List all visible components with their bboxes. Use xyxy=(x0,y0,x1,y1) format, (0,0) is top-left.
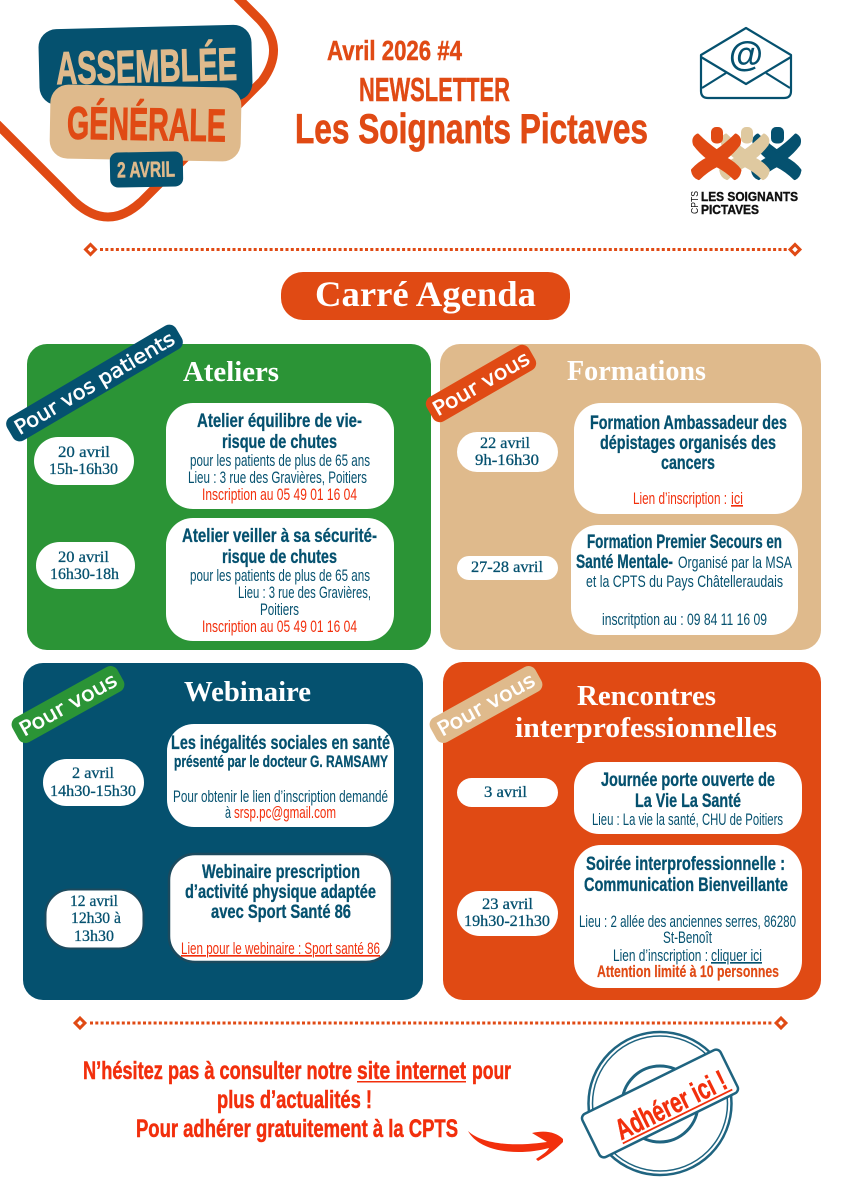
card: premier secours xyxy=(571,525,798,635)
date pill: 2 avril xyxy=(43,759,144,806)
card: inégalités sociales xyxy=(167,724,394,827)
date pill: 23 avril xyxy=(457,891,558,936)
card: atelier sécurité: risque de chutes xyxy=(222,547,337,568)
card: formation ambassadeur: Lien d’inscription : xyxy=(633,490,727,508)
card: atelier équilibre: Inscription au 05 49 01 16 04 xyxy=(202,486,357,504)
date pill: 2 avril: 2 avril xyxy=(72,765,115,782)
badge: Assemblée Générale 2 avril xyxy=(0,0,274,217)
card: atelier sécurité: Poitiers xyxy=(260,601,299,619)
logo: CPTS Les Soignants Pictaves: CPTS xyxy=(690,191,701,214)
card: prescription activité physique: Webinaire prescription xyxy=(202,862,360,883)
card: premier secours: inscritption au : 09 84 11 16 09 xyxy=(602,611,767,629)
date pill: 3 avril: 3 avril xyxy=(484,784,528,801)
text block: call to action xyxy=(83,1057,511,1143)
text block: call to action: pour xyxy=(472,1057,511,1085)
header title xyxy=(295,35,648,152)
heading: Formations: Formations xyxy=(567,355,706,387)
heading: Rencontres interprofessionnelles: interprofessionnelles xyxy=(515,712,777,744)
date pill: 22 avril: 22 avril xyxy=(480,435,531,452)
card: prescription activité physique xyxy=(169,854,392,962)
date pill: 2 avril: 14h30-15h30 xyxy=(50,783,136,800)
card: soirée interprofessionnelle: cliquer ici xyxy=(711,947,762,965)
header title: Avril 2026 #4 xyxy=(327,35,462,66)
text block: call to action: site internet xyxy=(357,1057,467,1085)
card: journée porte ouverte: La Vie La Santé xyxy=(635,791,741,812)
card: atelier équilibre: Atelier équilibre de vie- xyxy=(197,411,362,432)
card: inégalités sociales: Pour obtenir le lien d’inscription demandé xyxy=(173,788,388,806)
card: soirée interprofessionnelle: Attention limité à 10 personnes xyxy=(597,963,779,981)
panel: Webinaire xyxy=(23,663,423,1000)
icon: envelope with at sign: @ xyxy=(729,35,763,74)
tag: Pour vos patients: Pour vos patients xyxy=(10,326,179,440)
card: journée porte ouverte xyxy=(574,762,802,834)
tag: Pour vous (Formations): Pour vous xyxy=(428,346,534,421)
card: prescription activité physique: d’activité physique adaptée xyxy=(185,882,376,903)
card: premier secours: Santé Mentale- xyxy=(576,552,673,573)
heading: Carré Agenda xyxy=(281,272,570,320)
date pill: 12 avril: 12h30 à xyxy=(71,910,121,927)
card: soirée interprofessionnelle: St-Benoît xyxy=(663,929,712,947)
tag: Pour vous (Rencontres): Pour vous xyxy=(433,668,539,741)
heading: Webinaire: Webinaire xyxy=(184,676,311,708)
date pill: 12 avril: 12 avril xyxy=(70,893,119,910)
stamp: Adhérer ici xyxy=(580,1032,740,1175)
card: soirée interprofessionnelle: Lien d’inscription : xyxy=(613,947,708,965)
card: premier secours: et la CPTS du Pays Châtelleraudais xyxy=(586,573,783,591)
card: atelier sécurité xyxy=(166,518,394,641)
date pill: 20 avril 16h30: 16h30-18h xyxy=(50,566,119,583)
date pill: 20 avril 15h xyxy=(34,437,134,485)
card: inégalités sociales: Les inégalités sociales en santé xyxy=(171,733,390,754)
card: inégalités sociales: srsp.pc@gmail.com xyxy=(234,804,336,822)
date pill: 22 avril: 9h-16h30 xyxy=(475,452,539,469)
card: prescription activité physique: Lien pour le webinaire : Sport santé 86 xyxy=(181,940,380,958)
card: formation ambassadeur: Formation Ambassadeur des xyxy=(590,413,787,434)
card: atelier sécurité: pour les patients de plus de 65 ans xyxy=(190,567,370,585)
text block: call to action: Pour adhérer gratuitement à la CPTS xyxy=(136,1115,458,1143)
card: soirée interprofessionnelle: Communication Bienveillante xyxy=(584,875,788,896)
panel: Formations xyxy=(440,344,821,650)
arrow: to stamp xyxy=(468,1131,563,1161)
card: premier secours: Organisé par la MSA xyxy=(678,554,792,572)
card: prescription activité physique: avec Sport Santé 86 xyxy=(211,902,351,923)
card: soirée interprofessionnelle: Soirée interprofessionnelle : xyxy=(586,854,785,875)
tag: Pour vous (Webinaire): Pour vous xyxy=(15,668,121,741)
card: soirée interprofessionnelle xyxy=(574,845,802,988)
header title: NEWSLETTER xyxy=(359,71,510,108)
date pill: 27-28 avril xyxy=(457,556,558,580)
tag: Pour vous (Webinaire) xyxy=(9,663,127,746)
date pill: 12 avril xyxy=(46,890,144,948)
date pill: 27-28 avril: 27-28 avril xyxy=(471,559,544,576)
card: inégalités sociales: présenté par le docteur G. RAMSAMY xyxy=(174,753,388,771)
panel: Ateliers xyxy=(27,344,431,650)
badge: Assemblée Générale 2 avril: ASSEMBLÉE xyxy=(55,38,238,94)
date pill: 22 avril xyxy=(457,432,558,472)
logo: CPTS Les Soignants Pictaves: PICTAVES xyxy=(701,202,759,217)
card: formation ambassadeur: ici xyxy=(731,490,743,508)
header title: Les Soignants Pictaves xyxy=(295,105,648,152)
date pill: 23 avril: 19h30-21h30 xyxy=(464,913,550,930)
date pill: 23 avril: 23 avril xyxy=(482,896,534,913)
date pill: 20 avril 16h30 xyxy=(36,542,135,589)
text block: call to action: plus d’actualités ! xyxy=(217,1086,372,1114)
card: inégalités sociales: à xyxy=(225,804,232,822)
card: atelier équilibre: Lieu : 3 rue des Gravières, Poitiers xyxy=(188,469,367,487)
date pill: 20 avril 15h: 20 avril xyxy=(58,444,111,461)
card: formation ambassadeur: cancers xyxy=(661,453,715,474)
card: atelier équilibre xyxy=(166,403,394,509)
card: atelier sécurité: Atelier veiller à sa sécurité- xyxy=(182,526,377,547)
heading: Rencontres interprofessionnelles: Rencontres xyxy=(577,680,716,712)
logo: CPTS Les Soignants Pictaves xyxy=(690,127,800,217)
date pill: 3 avril xyxy=(457,778,558,807)
badge: Assemblée Générale 2 avril: GÉNÉRALE xyxy=(67,97,226,151)
card: formation ambassadeur xyxy=(574,403,802,514)
heading: Rencontres interprofessionnelles xyxy=(515,680,777,744)
date pill: 20 avril 15h: 15h-16h30 xyxy=(49,461,118,478)
card: journée porte ouverte: Journée porte ouverte de xyxy=(601,770,775,791)
card: atelier équilibre: pour les patients de plus de 65 ans xyxy=(190,452,370,470)
badge: Assemblée Générale 2 avril: 2 AVRIL xyxy=(117,156,175,183)
tag: Pour vous (Rencontres) xyxy=(427,663,545,746)
date pill: 12 avril: 13h30 xyxy=(74,928,114,945)
date pill: 20 avril 16h30: 20 avril xyxy=(58,549,110,566)
stamp: Adhérer ici: Adhérer ici ! xyxy=(610,1065,732,1147)
heading: Ateliers: Ateliers xyxy=(183,356,279,388)
tag: Pour vous (Formations) xyxy=(423,342,539,425)
text block: call to action: N’hésitez pas à consulter notre xyxy=(83,1057,352,1085)
logo: CPTS Les Soignants Pictaves: LES SOIGNANTS xyxy=(701,189,798,204)
icon: envelope with at sign xyxy=(701,28,791,98)
card: atelier sécurité: Lieu : 3 rue des Gravières, xyxy=(238,584,371,602)
panel: Rencontres interprofessionnelles xyxy=(443,662,821,1000)
card: atelier équilibre: risque de chutes xyxy=(222,432,337,453)
heading: Carré Agenda: Carré Agenda xyxy=(315,274,536,314)
card: atelier sécurité: Inscription au 05 49 01 16 04 xyxy=(202,618,357,636)
card: formation ambassadeur: dépistages organisés des xyxy=(600,433,776,454)
